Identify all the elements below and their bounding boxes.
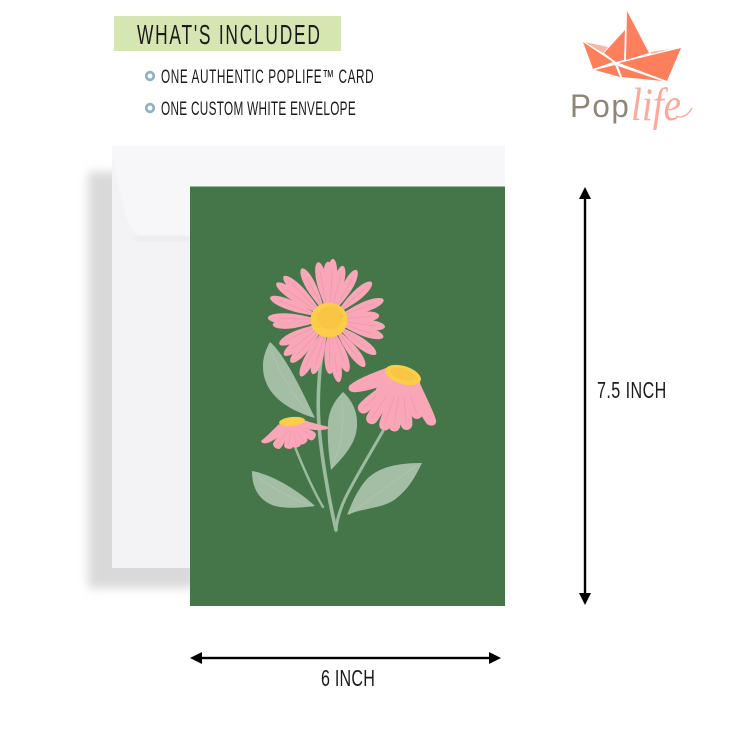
left petal (349, 368, 395, 392)
label: 7.5 inch: 7.5 INCH (597, 378, 666, 404)
illustration: stems (295, 352, 383, 530)
logo: Poplife (570, 11, 692, 131)
logo wordmark: Pop (570, 88, 629, 124)
illustration: leaves (252, 342, 422, 515)
bullet item: card: ONE AUTHENTIC POPLIFE™ CARD (161, 67, 374, 88)
envelope with shadow (88, 146, 505, 588)
envelope flap (112, 146, 505, 236)
label: 6 inch: 6 INCH (321, 666, 375, 692)
heading: what's included: WHAT'S INCLUDED (137, 19, 320, 50)
right petal (300, 420, 329, 430)
flower: large daisy (268, 259, 386, 383)
right petal (411, 381, 436, 426)
arrow: height dimension (579, 187, 591, 605)
list: included items (146, 67, 374, 120)
flower: small coneflower (261, 416, 329, 450)
left petal (261, 424, 288, 443)
bullet item: envelope: ONE CUSTOM WHITE ENVELOPE (161, 99, 356, 120)
icon: origami paper boat (583, 11, 681, 81)
logo wordmark (570, 79, 692, 131)
arrow: width dimension (190, 652, 501, 664)
flower: right coneflower (349, 361, 436, 432)
logo wordmark: life (631, 79, 681, 131)
card (190, 186, 505, 606)
